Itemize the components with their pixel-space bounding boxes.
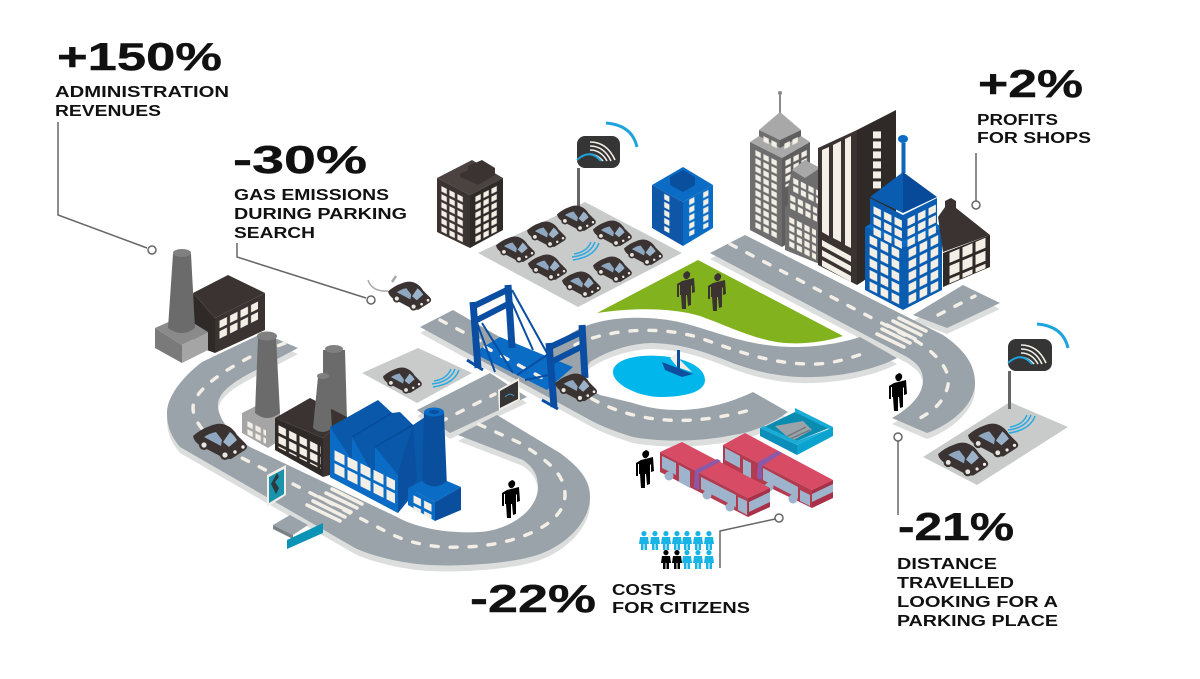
crowd of citizens (639, 531, 714, 569)
leader line: profits (972, 153, 980, 209)
parking lot right with cars (923, 324, 1068, 485)
person near road (502, 480, 520, 518)
lake with boat (613, 350, 705, 397)
stat: distance travelled: LOOKING FOR A (897, 594, 1058, 611)
leader line: costs (720, 514, 783, 568)
searching car with exhaust (368, 276, 431, 311)
stat: distance travelled: -21% (898, 506, 1014, 549)
red bus front (660, 442, 770, 517)
stat: profits for shops (977, 63, 1091, 147)
leader line: gas emissions (237, 243, 375, 304)
parking flag right (1008, 324, 1068, 409)
black tall tower (818, 110, 896, 285)
stat: profits for shops: PROFITS (977, 112, 1058, 129)
gray skyscraper (750, 91, 810, 247)
stat: distance travelled (897, 506, 1058, 630)
stairs and teal barrier (273, 515, 323, 549)
teal dock (760, 408, 833, 455)
sign with skater (267, 465, 286, 507)
stat: costs for citizens: FOR CITIZENS (612, 600, 750, 617)
parking lot small with car (362, 348, 472, 403)
stat: profits for shops: FOR SHOPS (977, 130, 1091, 147)
leader line: administration revenues (58, 122, 156, 254)
road network (167, 235, 1000, 571)
gray mid-rise building (785, 160, 820, 264)
parking flag with signal (577, 123, 637, 208)
dark shop building (938, 198, 990, 287)
blue skyscraper (865, 135, 942, 310)
factory middle gray and black (242, 332, 347, 477)
stat: distance travelled: PARKING PLACE (897, 613, 1058, 630)
blue factory (330, 400, 461, 521)
factory top left (155, 249, 265, 363)
parking lot with cars (478, 123, 682, 307)
stat: gas emissions: SEARCH (234, 225, 315, 242)
stat: distance travelled: TRAVELLED (897, 575, 1014, 592)
stat: administration revenues (55, 36, 229, 120)
blue office building (652, 167, 713, 246)
person near right curve (889, 373, 907, 411)
stat: administration revenues: +150% (57, 36, 222, 79)
stat: costs for citizens: COSTS (612, 582, 676, 599)
icon: two people in park (677, 271, 726, 311)
person near bus (636, 450, 654, 488)
dark office building (437, 160, 503, 248)
stat: gas emissions: DURING PARKING (234, 206, 407, 223)
leader line: distance (894, 433, 902, 515)
small dark road sign (498, 378, 520, 411)
stat: costs for citizens: -22% (470, 578, 596, 621)
green park (597, 260, 843, 343)
stat: distance travelled: DISTANCE (897, 556, 997, 573)
bridge (467, 285, 585, 409)
stat: administration revenues: REVENUES (55, 103, 161, 120)
stat: administration revenues: ADMINISTRATION (55, 84, 229, 101)
stat: gas emissions (233, 139, 407, 242)
road car left (193, 424, 247, 460)
stat: costs for citizens (470, 578, 750, 621)
stat: profits for shops: +2% (978, 63, 1083, 106)
car on bridge (555, 374, 597, 402)
stat: gas emissions: GAS EMISSIONS (234, 187, 389, 204)
red bus back (723, 433, 833, 508)
stat: gas emissions: -30% (233, 139, 367, 182)
